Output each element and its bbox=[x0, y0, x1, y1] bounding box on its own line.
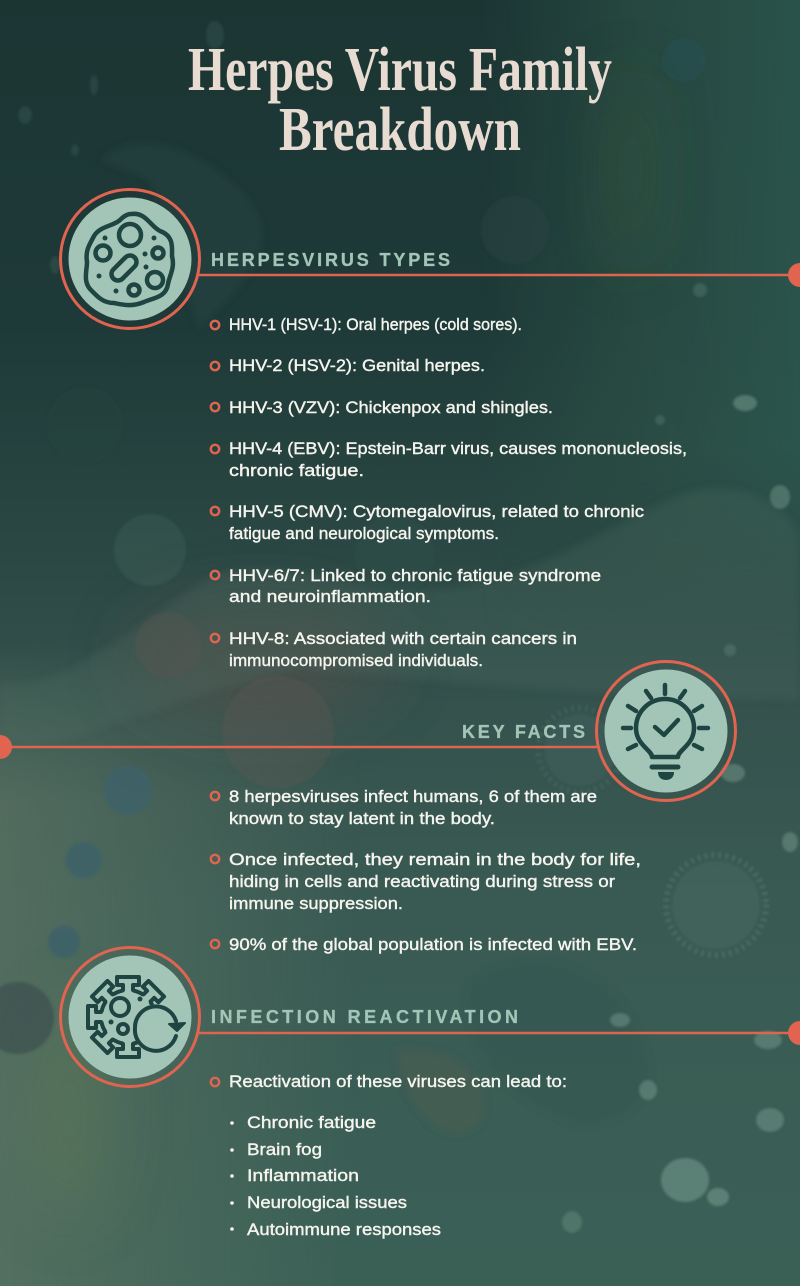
list: HHV-3 (VZV): Chickenpox and shingles. bbox=[229, 398, 553, 417]
icon: cell bbox=[60, 190, 200, 328]
sub-list: Autoimmune responses bbox=[247, 1220, 441, 1239]
heading: INFECTION REACTIVATION bbox=[211, 1007, 518, 1027]
sub-list: Neurological issues bbox=[247, 1193, 407, 1212]
list: HHV-5 (CMV): Cytomegalovirus, related to chronic bbox=[229, 502, 645, 521]
icon: virus with reactivation arrow bbox=[60, 948, 200, 1086]
title bbox=[188, 36, 612, 164]
list: HHV-6/7: Linked to chronic fatigue syndrome bbox=[229, 566, 601, 585]
heading: KEY FACTS bbox=[462, 722, 585, 742]
sub-list bbox=[230, 1113, 441, 1239]
panel: herpesvirus types bbox=[60, 190, 800, 670]
icon: light bulb bbox=[596, 662, 736, 800]
list: fatigue and neurological symptoms. bbox=[229, 524, 499, 543]
panel: infection reactivation bbox=[60, 948, 800, 1239]
list: HHV-1 (HSV-1): Oral herpes (cold sores). bbox=[229, 315, 522, 334]
list: hiding in cells and reactivating during stress or bbox=[229, 872, 615, 891]
title: Herpes Virus Family bbox=[188, 36, 612, 104]
section rule with end dot bbox=[199, 1021, 800, 1045]
list: HHV-2 (HSV-2): Genital herpes. bbox=[229, 356, 485, 375]
sub-list: Chronic fatigue bbox=[247, 1113, 376, 1132]
section rule with end dot bbox=[199, 263, 800, 287]
sub-list: Inflammation bbox=[247, 1166, 359, 1185]
sub-list: Brain fog bbox=[247, 1140, 322, 1159]
list bbox=[211, 1072, 567, 1239]
list bbox=[211, 315, 687, 670]
list: and neuroinflammation. bbox=[229, 587, 431, 606]
section rule with end dot bbox=[0, 735, 597, 759]
list: HHV-4 (EBV): Epstein-Barr virus, causes mononucleosis, bbox=[229, 439, 687, 458]
list: HHV-8: Associated with certain cancers in bbox=[229, 629, 577, 648]
list: Once infected, they remain in the body for life, bbox=[229, 850, 641, 869]
list: 90% of the global population is infected with EBV. bbox=[229, 935, 637, 954]
panel: key facts bbox=[0, 662, 736, 954]
list: Reactivation of these viruses can lead to: bbox=[229, 1072, 567, 1091]
list: known to stay latent in the body. bbox=[229, 809, 495, 828]
list bbox=[211, 787, 641, 954]
list: immune suppression. bbox=[229, 894, 403, 913]
list: chronic fatigue. bbox=[229, 461, 364, 480]
list: immunocompromised individuals. bbox=[229, 651, 483, 670]
list: 8 herpesviruses infect humans, 6 of them are bbox=[229, 787, 597, 806]
heading: HERPESVIRUS TYPES bbox=[211, 250, 450, 270]
title: Breakdown bbox=[279, 96, 521, 164]
